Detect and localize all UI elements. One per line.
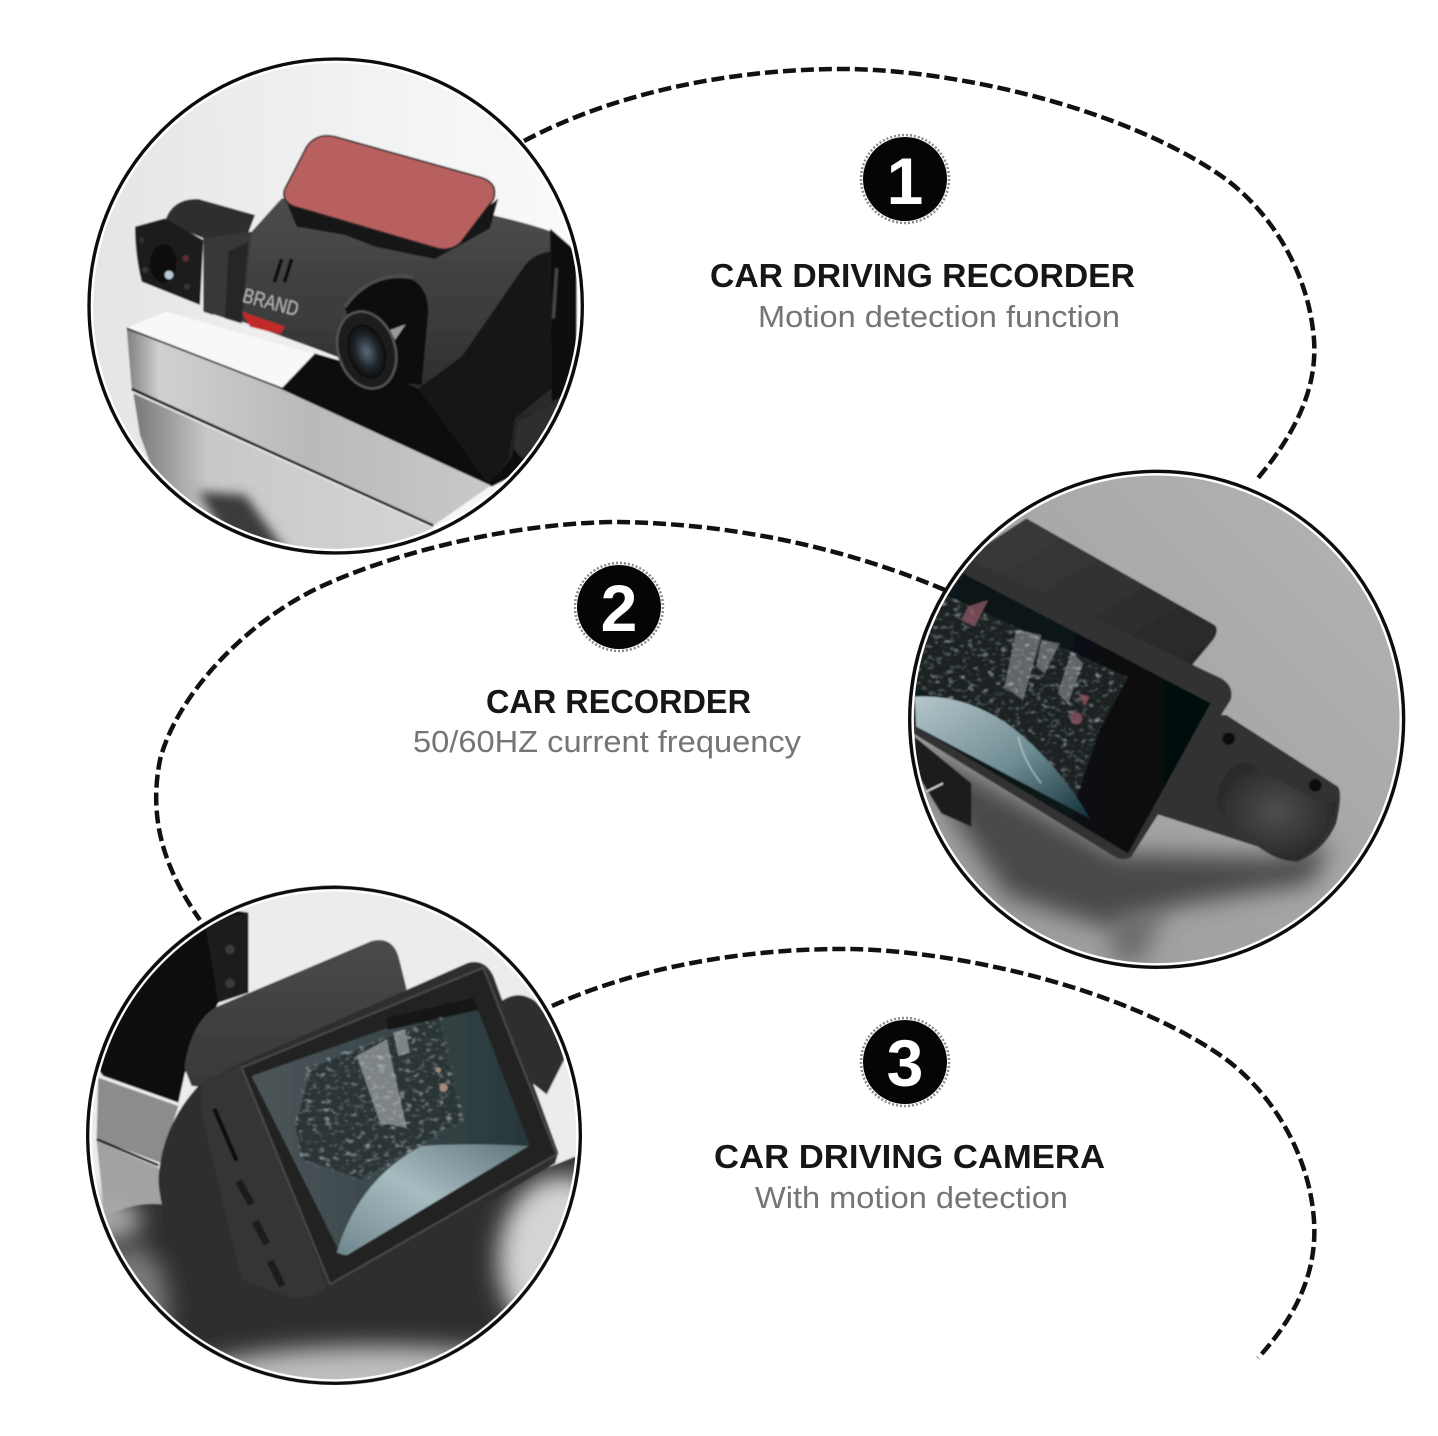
white inner ring 1 (92, 62, 579, 550)
number badge 2 (575, 563, 663, 651)
device body (910, 559, 1232, 859)
adhesive mount (184, 940, 407, 1089)
circle outline 3 (88, 887, 580, 1383)
heading 1: CAR DRIVING RECORDER (710, 257, 1135, 294)
adhesive mount (965, 518, 1217, 670)
dashed connector 1 (524, 69, 1314, 478)
adhesive pad (284, 136, 498, 259)
subheading 3: With motion detection (755, 1180, 1068, 1215)
subheading 1: Motion detection function (758, 299, 1120, 334)
heading 3: CAR DRIVING CAMERA (714, 1138, 1105, 1175)
reflective floor (68, 1153, 625, 1426)
number badge 2: 2 (601, 571, 637, 645)
photo circle 3: dash cam front view (86, 886, 582, 1385)
subheading 2: 50/60HZ current frequency (413, 724, 802, 759)
number badge 1: 1 (887, 144, 923, 218)
white inner ring 2 (913, 474, 1401, 964)
screen (252, 998, 530, 1256)
device body (158, 961, 564, 1217)
number badge 3 (861, 1018, 949, 1106)
heading 2: CAR RECORDER (486, 683, 751, 720)
rear barrel (1155, 715, 1340, 862)
slot and buttons (214, 1109, 282, 1286)
number badge 1 (861, 135, 949, 223)
dashed connector 3 (552, 949, 1314, 1358)
dashed connector 2 (156, 522, 945, 920)
screen (911, 573, 1211, 853)
brand label: BRAND (240, 284, 301, 321)
rear camera (135, 199, 255, 323)
circle outline 2 (910, 471, 1404, 967)
lens (336, 274, 428, 391)
white inner ring 3 (91, 890, 577, 1380)
circle outline 1 (89, 59, 582, 553)
photo circle 2: dash cam screen (908, 470, 1408, 970)
rear barrel (502, 995, 564, 1094)
photo circle 1: dash cam with red adhesive pad (85, 55, 585, 558)
number badge 3: 3 (887, 1026, 923, 1100)
